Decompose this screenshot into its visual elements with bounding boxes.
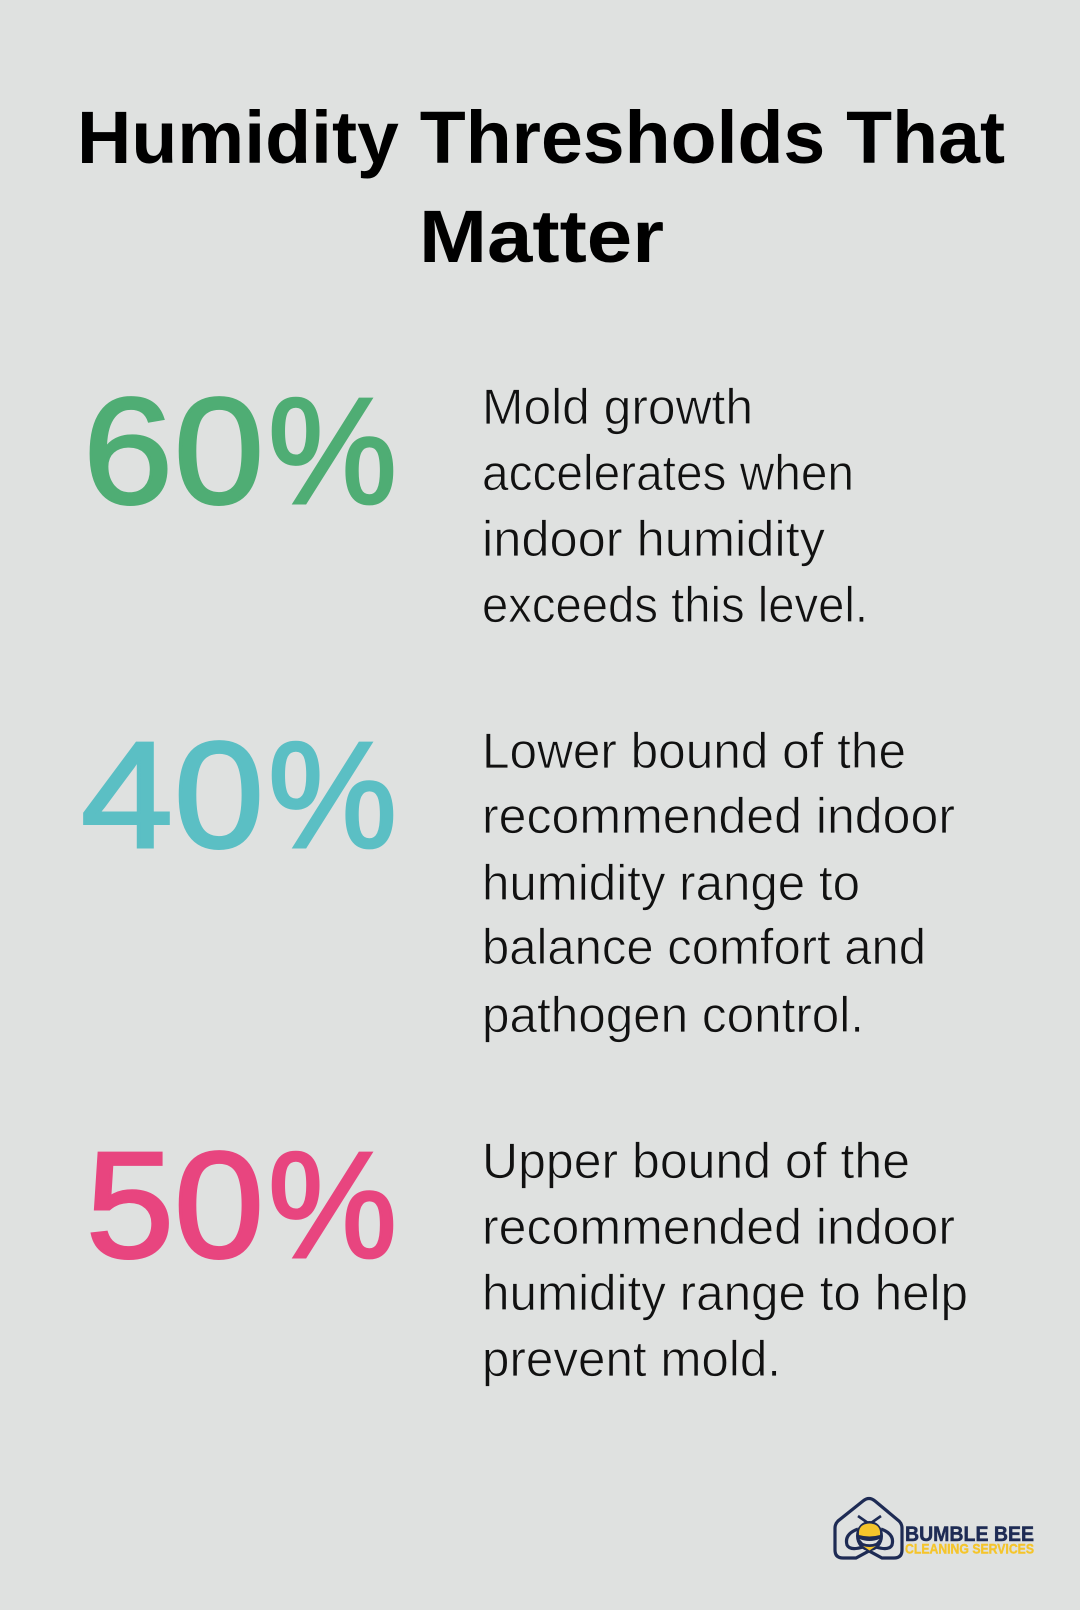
number 50%: 5 [86,1120,174,1289]
number 40% [81,710,397,879]
stat 60% [83,366,868,633]
description 50%: Upper bound of the [482,1133,910,1189]
number 50% [86,1120,397,1289]
description 50%: humidity range to help [482,1265,968,1321]
logo: Bumble Bee Cleaning Services [835,1498,1034,1558]
description 40%: Lower bound of the [482,723,906,779]
description 60%: exceeds this level. [482,577,868,633]
number 40%: % [268,710,397,879]
description 50%: prevent mold. [482,1331,781,1387]
description 60%: Mold growth [482,379,753,435]
icon: house with bee [835,1498,902,1558]
number 50%: 0 [174,1120,264,1289]
description 40%: pathogen control. [482,987,864,1043]
stat 40% [81,710,955,1043]
title: Matter [419,195,664,278]
description 40%: balance comfort and [482,919,926,975]
number 50%: % [268,1120,397,1289]
description 40%: humidity range to [482,855,860,911]
number 40%: 4 [81,710,173,879]
title: Humidity Thresholds That [77,96,1005,179]
description 60% [482,379,868,633]
number 60%: 6 [83,366,173,535]
description 60%: indoor humidity [482,511,825,567]
description 60%: accelerates when [482,445,854,501]
number 60% [83,366,397,535]
number 60%: % [268,366,397,535]
description 50%: recommended indoor [482,1199,955,1255]
logo tagline: CLEANING SERVICES [905,1542,1034,1556]
stat 50% [86,1120,968,1387]
description 40%: recommended indoor [482,788,955,844]
title [77,96,1005,278]
description 50% [482,1133,968,1387]
logo wordmark: BUMBLE BEE [905,1523,1034,1546]
number 40%: 0 [174,710,264,879]
number 60%: 0 [174,366,264,535]
description 40% [482,723,955,1043]
